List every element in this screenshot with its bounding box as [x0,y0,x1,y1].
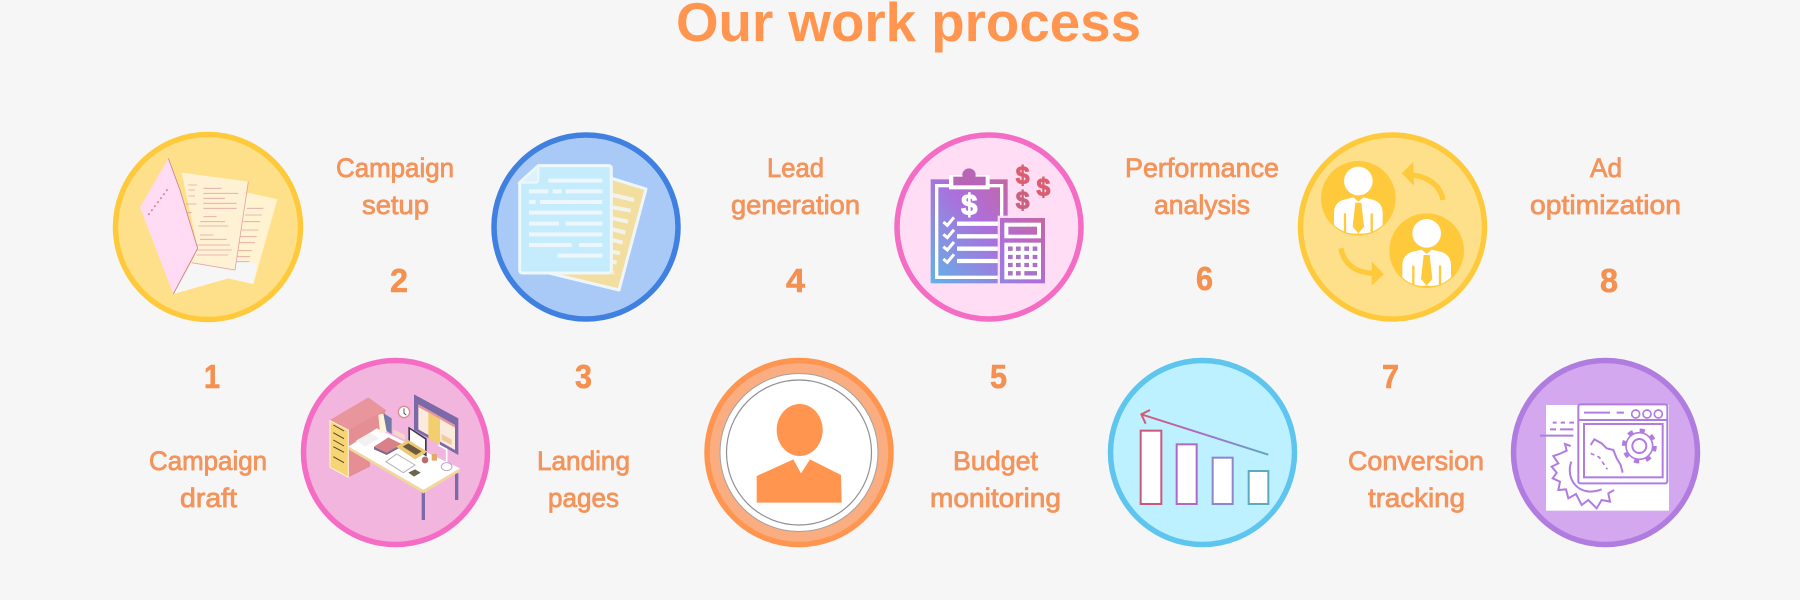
badge circle: pink [304,360,488,544]
label: campaign setup [336,153,454,220]
label: budget monitoring: Budget [953,446,1038,476]
step 4: lead generation [707,153,891,544]
label: performance analysis: Performance [1125,153,1279,183]
icon: clipboard and calculator with dollars: $ [1016,187,1030,214]
number 2: 2 [390,262,408,299]
icon: person silhouette [757,404,842,503]
badge circle: light pink [897,135,1081,319]
number 1: 1 [204,358,220,395]
label: ad optimization: Ad [1590,153,1622,183]
icon: clipboard and calculator with dollars [931,162,1050,286]
icon: two people exchanging [1321,161,1464,288]
label: conversion tracking: Conversion [1348,446,1484,476]
icon: isometric office desk [330,394,460,520]
white inner disc with grey rings [720,374,878,532]
icon: clipboard and calculator with dollars: $ [1016,162,1030,189]
label: performance analysis [1125,153,1279,220]
badge circle: orange [707,360,891,544]
badge circle: light blue [1110,360,1294,544]
step 2: campaign setup [304,153,488,544]
badge circle: yellow [1300,135,1484,319]
label: ad optimization: optimization [1530,190,1681,220]
number 7: 7 [1382,358,1399,395]
label: campaign draft: Campaign [149,446,267,476]
label: lead generation [731,153,860,220]
label: performance analysis: analysis [1154,190,1250,220]
number 5: 5 [990,358,1007,395]
label: landing pages: pages [548,483,619,513]
label: campaign draft [149,446,267,513]
number 3: 3 [575,358,592,395]
icon: open folder with papers [140,158,277,294]
label: conversion tracking [1348,446,1484,513]
label: lead generation: generation [731,190,860,220]
icon: stacked documents [520,166,646,290]
badge circle: purple [1514,360,1698,544]
badge circle: blue [494,135,678,319]
label: ad optimization [1530,153,1681,220]
icon: browser window with gears [1540,404,1669,511]
number 8: 8 [1600,262,1618,299]
label: landing pages: Landing [537,446,630,476]
icon: clipboard and calculator with dollars: $ [1036,175,1050,202]
label: campaign setup: setup [362,190,429,220]
step 7: conversion tracking [1300,135,1484,513]
step 1: campaign draft [116,134,300,513]
icon: clipboard and calculator with dollars: $ [961,189,977,222]
step 3: landing pages [494,135,678,513]
number 4: 4 [786,262,806,299]
label: campaign draft: draft [180,483,238,513]
step 8: ad optimization [1514,153,1698,544]
step 5: budget monitoring [897,135,1081,513]
label: landing pages [537,446,630,513]
number 6: 6 [1196,260,1213,297]
label: conversion tracking: tracking [1368,483,1465,513]
step 6: performance analysis [1110,153,1294,544]
icon: descending bar chart with arrow [1141,410,1268,504]
label: campaign setup: Campaign [336,153,454,183]
badge circle: yellow [116,134,300,320]
label: budget monitoring [930,446,1061,513]
label: budget monitoring: monitoring [930,483,1061,513]
label: lead generation: Lead [767,153,824,183]
